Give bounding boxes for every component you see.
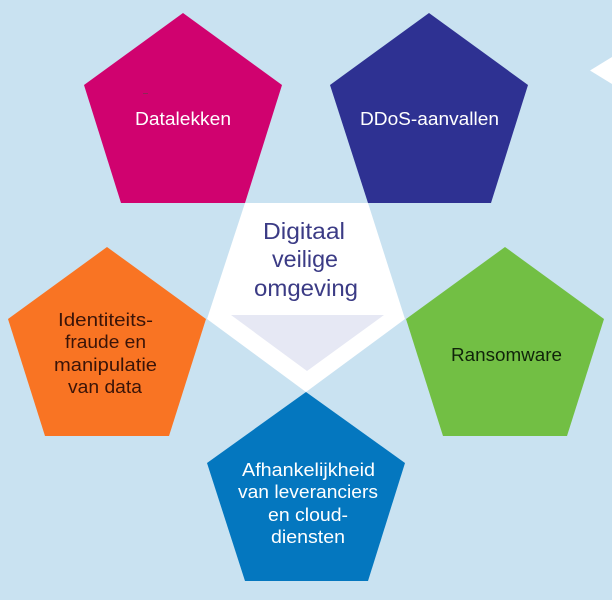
- pentagon: Afhankelijkheid van leveranciers en clouddiensten: [207, 392, 405, 581]
- centre heading: Digitaal: [263, 218, 345, 244]
- pentagon: Identiteitsfraude en manipulatie van data: fraude en: [65, 332, 146, 352]
- centre heading: omgeving: [254, 275, 358, 301]
- pentagon: Datalekken: Datalekken: [135, 109, 231, 129]
- pentagon: Identiteitsfraude en manipulatie van data: van data: [68, 377, 143, 397]
- pentagon: Ransomware: Ransomware: [451, 345, 562, 365]
- pentagon: Ransomware: [406, 247, 604, 436]
- cropped white arrow at right edge: [590, 57, 612, 84]
- centre heading: [254, 218, 358, 301]
- inner pale triangle: [231, 315, 384, 371]
- pentagon: Datalekken: [84, 13, 282, 203]
- pentagon: Afhankelijkheid van leveranciers en clouddiensten: van leveranciers: [238, 482, 378, 502]
- pentagon: Afhankelijkheid van leveranciers en clouddiensten: diensten: [271, 527, 345, 547]
- pentagon: Identiteitsfraude en manipulatie van data: Identiteits-: [58, 310, 153, 330]
- centre pentagon: Digitaal veilige omgeving: [207, 203, 405, 392]
- pentagon: DDoS-aanvallen: [330, 13, 528, 203]
- pentagon: Identiteitsfraude en manipulatie van data: [8, 247, 206, 436]
- pentagon: Afhankelijkheid van leveranciers en clouddiensten: Afhankelijkheid: [242, 460, 375, 480]
- pentagon: Afhankelijkheid van leveranciers en clouddiensten: en cloud-: [268, 505, 348, 525]
- pentagon: DDoS-aanvallen: DDoS-aanvallen: [360, 109, 499, 129]
- centre heading: veilige: [272, 246, 338, 272]
- pentagon: Identiteitsfraude en manipulatie van data: manipulatie: [54, 355, 157, 375]
